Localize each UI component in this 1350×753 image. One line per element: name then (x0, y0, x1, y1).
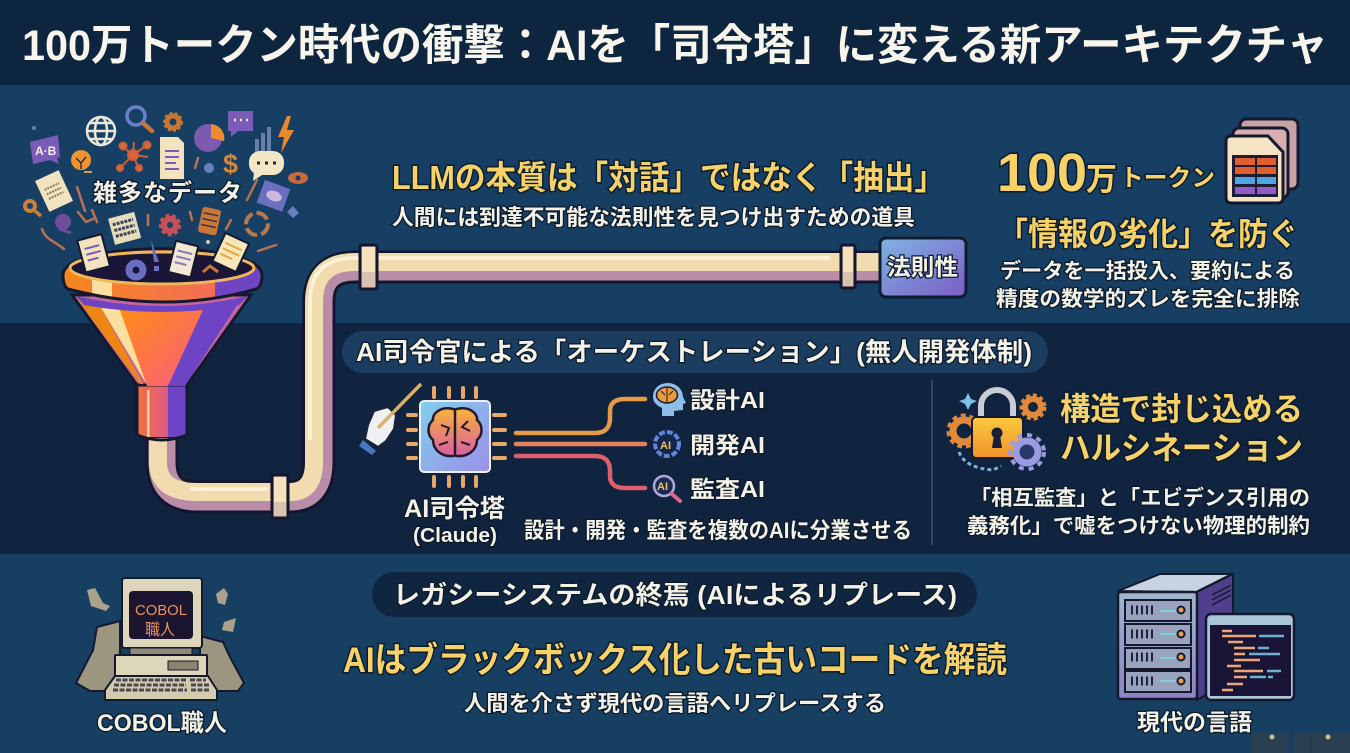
label: modern language: 現代の言語 (1137, 709, 1252, 735)
chip pins (408, 388, 505, 486)
icon: modern server (1118, 574, 1294, 700)
icon: A-B bubble (30, 135, 60, 164)
heading: contain hallucination: 構造で封じ込める (1060, 391, 1303, 427)
icon cloud: miscellaneous data (25, 107, 308, 251)
icon: A-B bubble: A·B (35, 144, 57, 158)
heading: one million tokens: 100 (997, 143, 1087, 203)
code window (1206, 614, 1294, 700)
icon: purple blob (55, 214, 71, 233)
icon: dev AI: AI (660, 440, 671, 452)
connector lines (516, 399, 645, 488)
hand with baton (359, 384, 421, 455)
agents list (653, 383, 765, 502)
icon: dollar: $ (223, 149, 238, 179)
text: hallucination description: 義務化」で嘘をつけない物理的制約 (967, 515, 1310, 538)
label: AI command tower (404, 495, 505, 547)
funnel rim (63, 249, 265, 310)
icon: chat bubble purple (228, 111, 253, 137)
icon: speech bubble (249, 151, 284, 181)
icon: database stack (197, 206, 221, 236)
icon: old computer with COBOL (76, 578, 244, 700)
text: degradation description: 精度の数学的ズレを完全に排除 (996, 287, 1300, 311)
heading: one million tokens: トークン (1120, 165, 1215, 192)
icon: document (160, 137, 184, 179)
funnel stem (137, 383, 187, 437)
pipe (158, 245, 880, 518)
heading: decode old code: AIはブラックボックス化した古いコードを解読 (343, 640, 1007, 680)
heading pill: orchestration: AI司令官による「オーケストレーション」(無人開発体制) (356, 337, 1032, 367)
icon: document stack (1226, 119, 1298, 203)
output box: 法則性 (887, 254, 958, 280)
icon: bolt (278, 116, 294, 153)
label: COBOL craftsman: COBOL職人 (97, 710, 227, 737)
heading: one million tokens (997, 143, 1215, 203)
funnel (63, 233, 265, 440)
keyboard (105, 676, 217, 700)
heading: one million tokens: 万 (1086, 161, 1117, 197)
decorative squiggles (42, 158, 276, 251)
heading pill: legacy: レガシーシステムの終焉 (AIによるリプレース) (393, 580, 957, 610)
chip body (420, 401, 490, 472)
label: miscellaneous data: 雑多なデータ (93, 179, 242, 207)
pipe flanges (272, 245, 855, 518)
base unit (115, 655, 207, 676)
icon: tilted data doc (35, 170, 73, 212)
server slots (1125, 600, 1191, 692)
rubble (76, 621, 244, 691)
heading: prevent degradation: 「情報の劣化」を防ぐ (998, 216, 1298, 252)
icon: pie chart (194, 124, 224, 152)
label: dev AI: 開発AI (690, 432, 765, 458)
label: design AI: 設計AI (690, 387, 765, 413)
icon: magnifier (127, 107, 152, 131)
label: AI command tower: (Claude) (413, 525, 497, 547)
heading: contain hallucination: ハルシネーション (1060, 430, 1303, 466)
brain (428, 408, 482, 456)
text: hallucination description: 「相互監査」と「エビデンス引用の (970, 486, 1310, 510)
heading pill: orchestration (342, 331, 1048, 373)
text: degradation description: データを一括投入、要約による (1000, 259, 1295, 283)
icon: code card (108, 212, 141, 245)
icon: bar chart (255, 127, 271, 153)
icon: gear (164, 113, 182, 131)
icon: old computer with COBOL: 職人 (145, 621, 175, 639)
icon: globe (87, 117, 115, 145)
icon: lightbulb (71, 150, 92, 172)
icon: network (117, 142, 150, 171)
funnel cone (72, 295, 251, 386)
heading: contain hallucination (1060, 391, 1303, 466)
heading: LLM essence: LLMの本質は「対話」ではなく「抽出」 (392, 159, 945, 196)
icon: AI command tower chip (359, 384, 505, 486)
label: AI command tower: AI司令塔 (404, 495, 505, 523)
text: degradation description (996, 259, 1300, 311)
icon: red gear (160, 215, 180, 235)
icon: ring (246, 213, 268, 235)
text: division of labour: 設計・開発・監査を複数のAIに分業させる (524, 518, 912, 543)
corner thumbnails (1252, 733, 1350, 753)
monitor (122, 578, 202, 648)
icon: orange magnifier (25, 201, 41, 216)
icon: audit AI: AI (657, 481, 668, 493)
icon: old computer with COBOL: COBOL (135, 602, 187, 619)
text: hallucination description (967, 486, 1310, 538)
icon: lock with gears (948, 390, 1045, 470)
heading pill: legacy (372, 572, 977, 617)
decorative dots (32, 126, 299, 244)
icon: design AI (653, 383, 686, 416)
title: 100万トークン時代の衝撃：AIを「司令塔」に変える新アーキテクチャ (22, 22, 1328, 70)
funnel content: documents (77, 233, 249, 277)
output box (880, 238, 966, 297)
text: LLM description: 人間には到達不可能な法則性を見つけ出すための道具 (392, 205, 915, 230)
text: replace description: 人間を介さず現代の言語へリプレースする (464, 691, 886, 716)
icon: brain card (257, 180, 290, 212)
label: audit AI: 監査AI (690, 476, 765, 502)
icon: eye (288, 172, 308, 184)
